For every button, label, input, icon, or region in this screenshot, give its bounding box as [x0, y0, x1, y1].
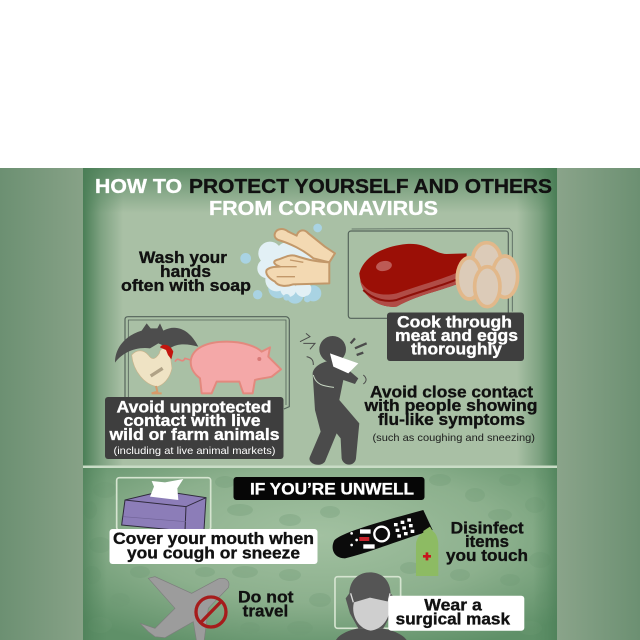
icon: coughing person: [300, 333, 367, 465]
text: wash your hands: [121, 249, 251, 295]
callout: cover your mouth: Cover your mouth when: [113, 530, 314, 548]
callout: cook through: meat and eggs: [395, 327, 518, 345]
text: avoid close contact: flu-like symptoms: [378, 411, 525, 429]
text: disinfect items: you touch: [446, 547, 528, 565]
panel: prevention section background: [83, 168, 557, 466]
callout: avoid unprotected contact: wild or farm animals: [108, 426, 280, 444]
icon: disinfectant bottle: [416, 527, 438, 576]
text: disinfect items: [446, 520, 528, 565]
text: avoid close contact: Avoid close contact: [370, 384, 534, 402]
callout: wear a surgical mask: [388, 596, 524, 631]
heading: if you're unwell: IF YOU’RE UNWELL: [250, 479, 414, 498]
text: disinfect items: Disinfect: [451, 520, 524, 538]
text: disinfect items: items: [465, 533, 509, 551]
title: HOW TO: [95, 175, 182, 198]
icon: remote control: [333, 510, 433, 558]
title: PROTECT YOURSELF AND OTHERS: [189, 175, 552, 198]
callout: cook through: Cook through: [397, 314, 512, 332]
text: wash your hands: Wash your: [139, 249, 228, 267]
text: do not travel: Do not: [238, 589, 294, 607]
callout: cook through: [387, 312, 524, 361]
callout: cover your mouth: [110, 529, 318, 564]
callout: avoid unprotected contact: (including at live animal markets): [114, 445, 276, 457]
callout: avoid unprotected contact: contact with live: [124, 412, 260, 430]
text: do not travel: travel: [243, 603, 288, 621]
panel: unwell section background: [83, 466, 557, 640]
icon: steak: [359, 244, 467, 307]
icon: eggs: [457, 243, 518, 307]
callout: cover your mouth: you cough or sneeze: [127, 544, 300, 562]
callout: cook through: thoroughly: [411, 340, 503, 358]
panel: right side backdrop: [557, 168, 640, 640]
callout: wear a surgical mask: Wear a: [424, 597, 483, 615]
text: wash your hands: often with soap: [121, 277, 251, 295]
callout: wear a surgical mask: surgical mask: [396, 610, 511, 628]
icon: person with mask: [335, 572, 407, 640]
icon: pig: [175, 342, 281, 393]
icon: airplane with no sign: [140, 577, 229, 640]
callout: avoid unprotected contact: Avoid unprotected: [116, 398, 272, 416]
panel: animals: [115, 317, 289, 409]
icon: soapy hands: [240, 224, 335, 304]
title: FROM CORONAVIRUS: [209, 197, 438, 220]
icon: rooster: [132, 345, 173, 393]
title: [95, 175, 552, 220]
text: avoid close contact: with people showing: [363, 397, 538, 415]
panel: left side backdrop: [0, 168, 83, 640]
text: avoid close contact: [363, 384, 538, 444]
text: wash your hands: hands: [160, 263, 211, 281]
icon: bat: [115, 323, 198, 363]
text: do not travel: [238, 589, 294, 621]
panel: cook meat and eggs: [348, 228, 518, 318]
text: avoid close contact: (such as coughing and sneezing): [372, 432, 535, 444]
icon: tissue box: [117, 478, 211, 531]
callout: avoid unprotected contact: [105, 397, 284, 459]
